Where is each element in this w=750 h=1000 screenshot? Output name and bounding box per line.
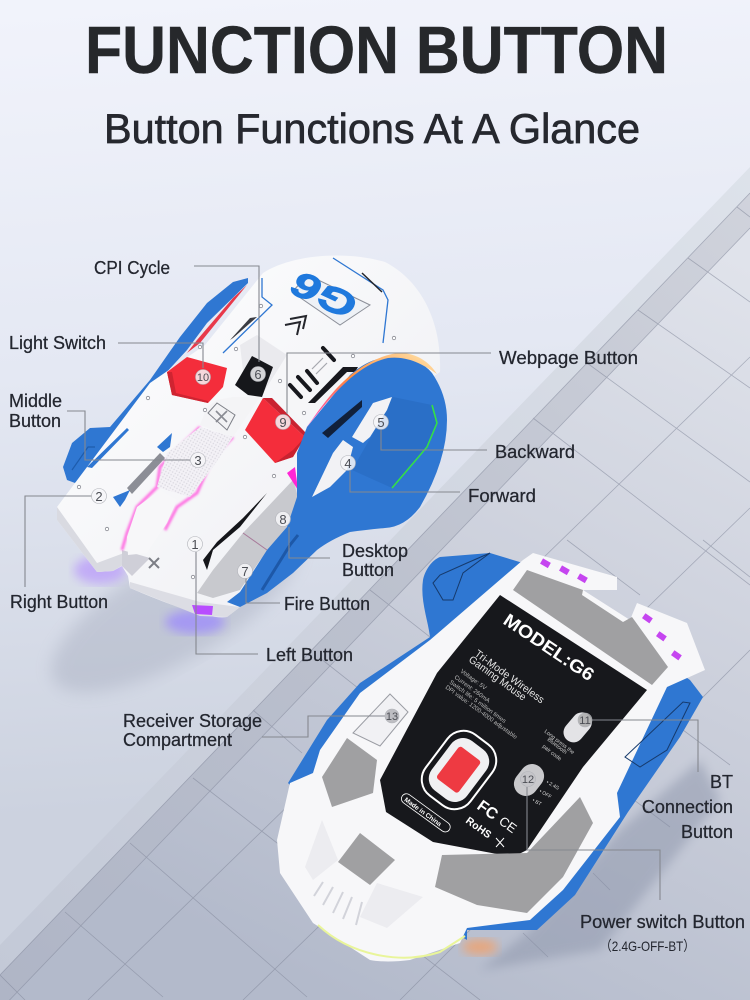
RGB strip	[306, 353, 437, 428]
label: Receiver Storage Compartment: Compartment	[123, 730, 232, 750]
front ribs	[314, 882, 362, 925]
black label plate	[380, 595, 647, 857]
label: Webpage Button: Webpage Button	[499, 348, 638, 368]
gray side buttons	[197, 480, 298, 598]
thumb button 5	[352, 397, 392, 443]
bottom mouse: Long press the	[543, 729, 575, 756]
number badges	[92, 366, 592, 786]
number badges: 7	[241, 564, 249, 579]
black flash	[203, 493, 267, 570]
BT switch	[559, 708, 596, 746]
number badges: 12	[522, 774, 534, 786]
label text: MODEL:G6	[500, 610, 598, 685]
blue grip pattern	[433, 553, 490, 600]
bottom mouse: RoHS	[463, 815, 493, 841]
label: Backward: Backward	[495, 442, 575, 462]
bottom mouse: • 2.4G	[545, 780, 560, 792]
left blue wing	[63, 278, 248, 483]
label: Light Switch: Light Switch	[9, 333, 106, 353]
vent slats	[290, 348, 334, 397]
bottom mouse: Gaming Mouse	[466, 654, 528, 703]
label: BT Connection Button: BT	[710, 772, 733, 792]
shadow	[480, 760, 720, 970]
label: Fire Button: Fire Button	[284, 594, 370, 614]
made in china	[399, 792, 452, 834]
vents	[540, 558, 682, 660]
X plate	[208, 403, 235, 430]
made in china: Made in China	[403, 797, 443, 828]
leader lines	[25, 266, 698, 900]
label: BT Connection Button: Button	[681, 822, 733, 842]
rgb underglow edge	[318, 925, 465, 958]
bottom mouse: • BT	[531, 798, 542, 807]
gray feet	[322, 570, 668, 913]
pink glow around wheel	[122, 427, 200, 550]
label: Right Button: Right Button	[10, 592, 108, 612]
bottom mouse	[277, 553, 720, 970]
scroll wheel	[157, 427, 233, 497]
purple strip	[192, 605, 213, 615]
shadowed front edges	[57, 507, 128, 572]
number badges: 9	[279, 415, 287, 430]
X mark	[149, 558, 159, 568]
blue trim lines	[223, 278, 272, 353]
right blue grip	[227, 357, 447, 607]
label: Desktop Button: Button	[342, 560, 394, 580]
label: CPI Cycle: CPI Cycle	[94, 258, 170, 278]
thumb button 4	[312, 440, 353, 497]
main white body	[57, 255, 440, 617]
number badges: 2	[95, 489, 103, 504]
pink accent	[287, 467, 298, 490]
rear glow	[462, 939, 498, 955]
bottom mouse: Bluetooth	[546, 737, 568, 756]
label: Receiver Storage Compartment: Receiver Storage	[123, 711, 262, 731]
bottom mouse: Voltage: 5V	[459, 669, 487, 692]
label: BT Connection Button: Connection	[642, 797, 733, 817]
label: Power switch Button: Power switch Button	[580, 912, 745, 932]
label: Left Button: Left Button	[266, 645, 353, 665]
blue shell	[288, 553, 703, 940]
title: FUNCTION BUTTON	[85, 13, 668, 88]
green light	[392, 405, 437, 488]
front middle pad	[127, 490, 177, 555]
power switch	[509, 759, 549, 801]
certification marks: FC	[474, 797, 501, 824]
red key 9	[245, 398, 305, 463]
subtitle: Button Functions At A Glance	[104, 105, 640, 152]
label: Middle Button: Middle	[9, 391, 62, 411]
white body	[277, 553, 705, 962]
number badges: 1	[191, 537, 199, 552]
sensor	[414, 723, 504, 817]
upper raised panel	[240, 335, 287, 395]
number badges: 10	[197, 372, 209, 384]
number badges: 8	[279, 512, 287, 527]
number badges: 5	[377, 415, 385, 430]
wing mark	[72, 447, 95, 470]
number badges: 6	[254, 367, 262, 382]
chevrons	[285, 316, 306, 335]
bottom mouse: Tri-Mode Wireless	[472, 648, 546, 706]
bottom mouse: CE	[496, 813, 520, 836]
red key 10	[167, 357, 227, 403]
grip pattern	[262, 535, 298, 590]
label: Desktop Button: Desktop	[342, 541, 408, 561]
label: 2.4G-OFF-BT: （2.4G-OFF-BT）	[600, 938, 695, 954]
top mouse: G6	[285, 262, 363, 328]
receiver cover	[353, 694, 408, 746]
black accents	[362, 273, 382, 292]
G6 badge	[292, 275, 370, 325]
X stripe logo	[322, 400, 362, 438]
number badges: 4	[344, 456, 352, 471]
grip panel	[352, 397, 437, 488]
bottom mouse: • OFF	[538, 789, 552, 800]
bottom mouse: DPI value: 1200-4000 adjustable	[444, 685, 518, 741]
central spine	[200, 397, 260, 437]
black key 6	[235, 356, 273, 397]
red stripe	[187, 285, 247, 353]
label: Middle Button: Button	[9, 411, 61, 431]
number badges: 11	[579, 715, 591, 727]
bottom mouse: Switch life: 5 million times	[448, 680, 507, 725]
number badges: 13	[386, 711, 398, 723]
bottom mouse: pair code	[541, 744, 562, 763]
label: Forward: Forward	[468, 486, 536, 506]
bottom mouse: Current: 260mA	[453, 675, 491, 705]
front recesses	[305, 820, 338, 880]
top mouse	[57, 255, 447, 634]
number badges: 3	[194, 453, 202, 468]
gap between front plates	[122, 550, 150, 576]
glow under mouse	[74, 556, 126, 584]
screws	[77, 304, 396, 579]
left stripe logo	[127, 453, 165, 494]
